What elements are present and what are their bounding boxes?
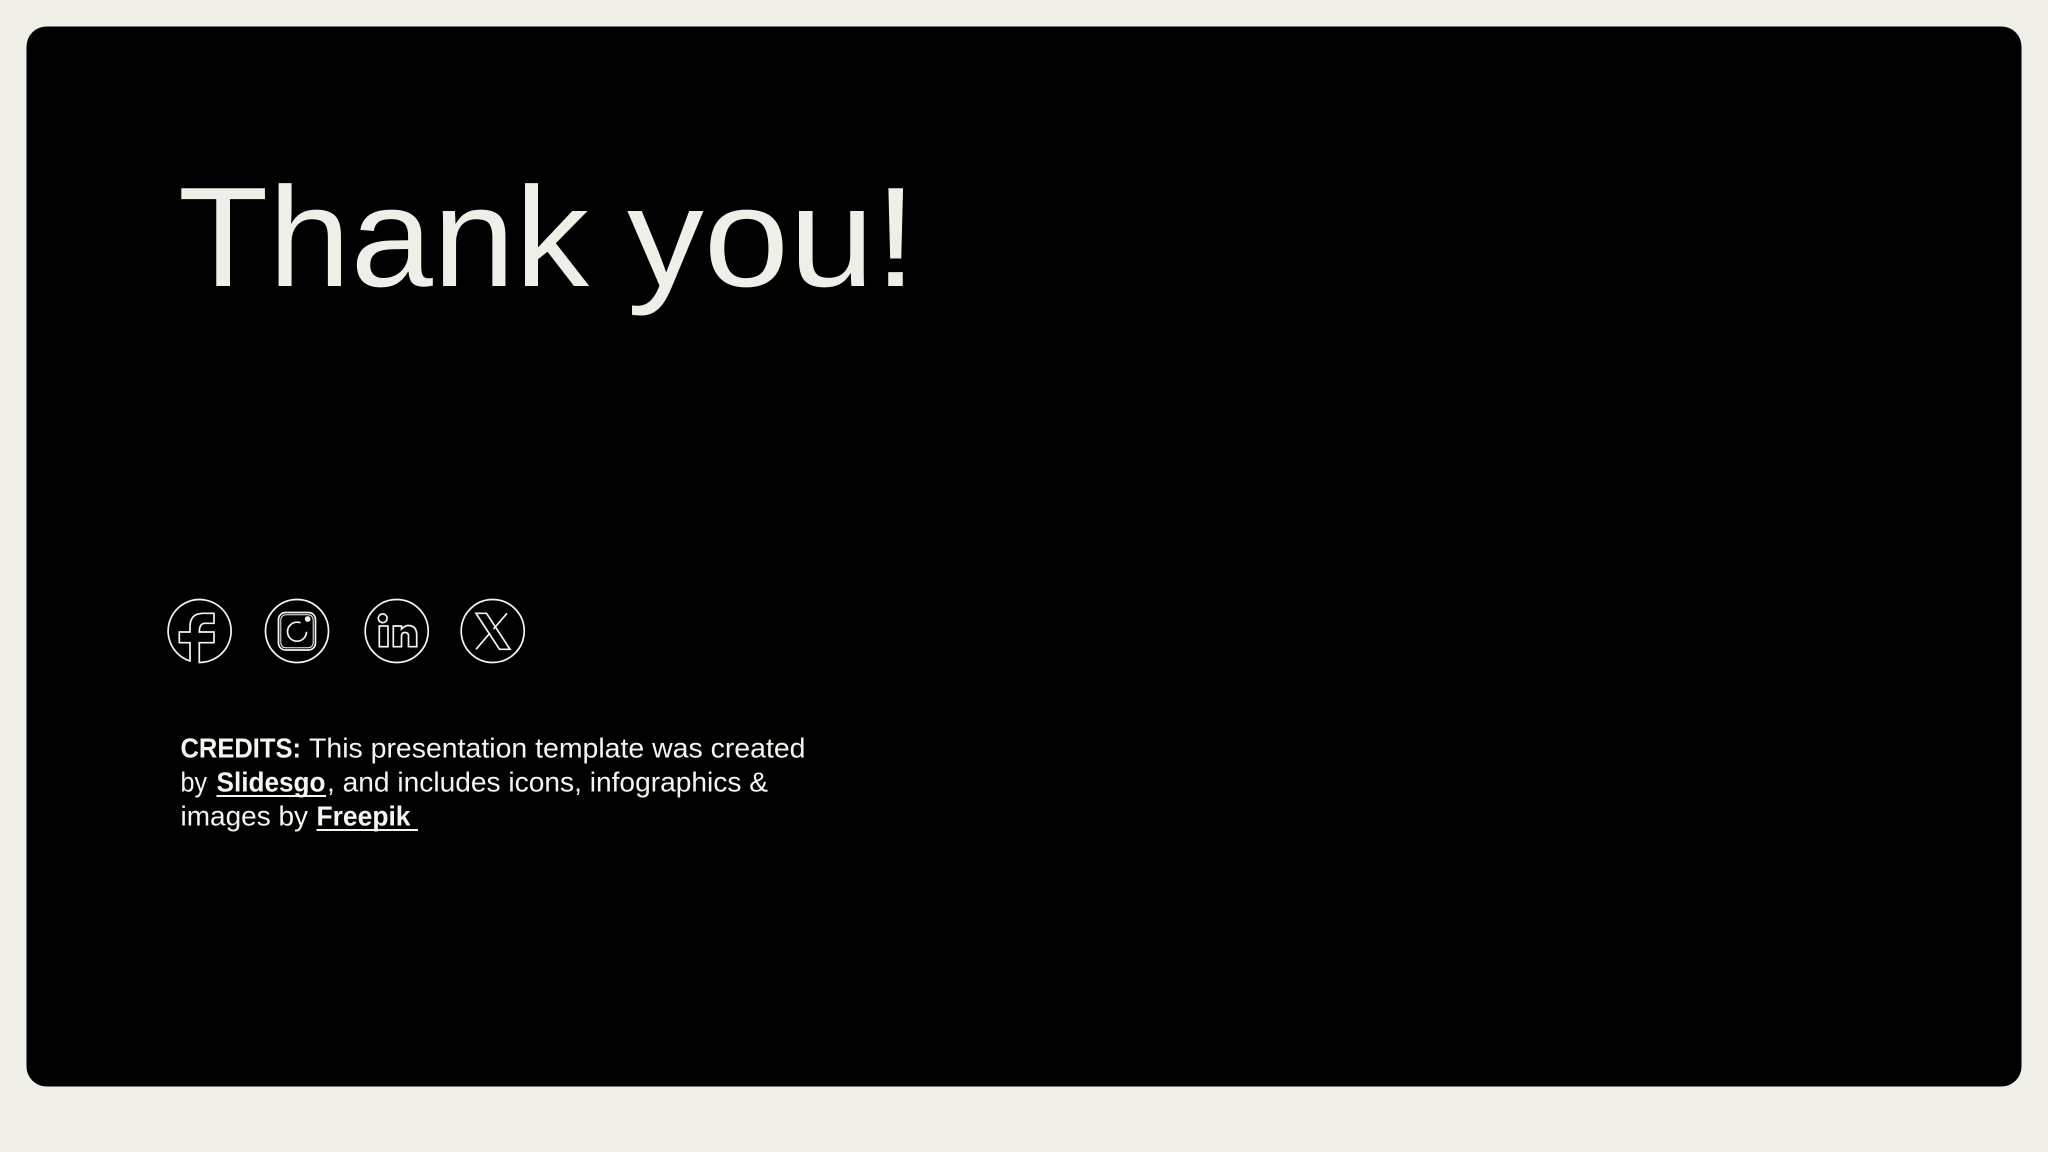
icon: instagram (266, 600, 328, 662)
credits text: by (180, 766, 207, 798)
icon: linkedin (365, 600, 428, 662)
social icons (168, 600, 524, 663)
title: you! (627, 158, 917, 317)
title (178, 158, 917, 317)
credits text: Freepik (316, 800, 411, 832)
credits text: , and includes icons, infographics & (327, 766, 768, 798)
credits text: images by (180, 800, 308, 832)
title: Thank (178, 158, 590, 317)
credits text: CREDITS: (180, 732, 301, 764)
icon: facebook (168, 600, 231, 663)
credits text: Slidesgo (216, 766, 326, 798)
credits text: This presentation template was created (309, 732, 806, 764)
icon: x (461, 600, 524, 662)
credits text (180, 732, 806, 832)
